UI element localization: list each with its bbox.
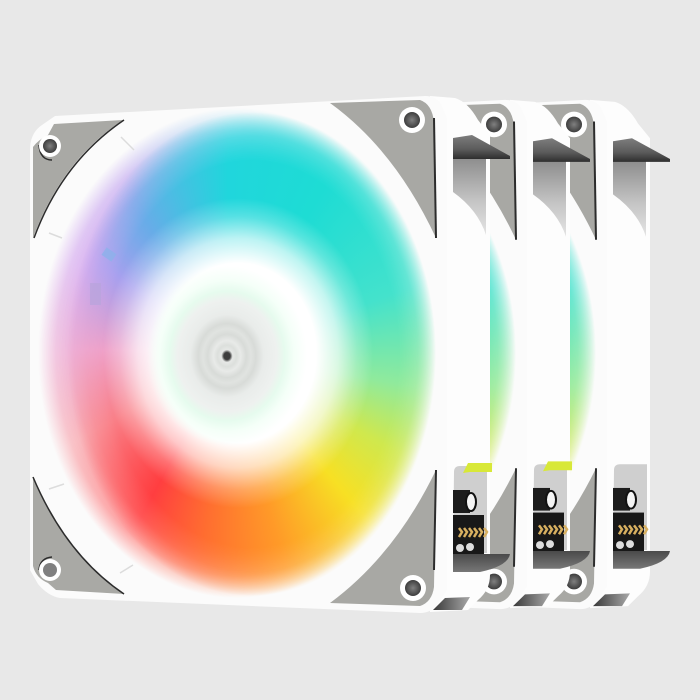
fan 3 (rear)	[534, 100, 670, 609]
fan 2 frame	[110, 100, 527, 609]
corner mount top-right	[330, 100, 436, 238]
fan 2 side housing	[510, 100, 590, 608]
fan 3 side housing	[590, 100, 670, 608]
fan 3 corner mounts	[542, 104, 597, 602]
fan 1 side housing	[430, 96, 510, 612]
fan 2 (middle)	[464, 100, 590, 609]
corner mount bottom-left	[33, 477, 124, 594]
fan 1 (front)	[30, 96, 510, 613]
central hub	[147, 266, 307, 446]
RGB blade glow	[40, 111, 435, 596]
fan 3 bottom wedge	[593, 593, 630, 606]
fan 2 bottom wedge	[513, 593, 550, 606]
fan 1 bottom wedge	[433, 597, 470, 610]
fan 1 frame	[30, 96, 447, 613]
corner mount bottom-right	[330, 470, 436, 606]
fan 3 frame	[190, 100, 607, 609]
corner mount top-left	[33, 120, 124, 238]
